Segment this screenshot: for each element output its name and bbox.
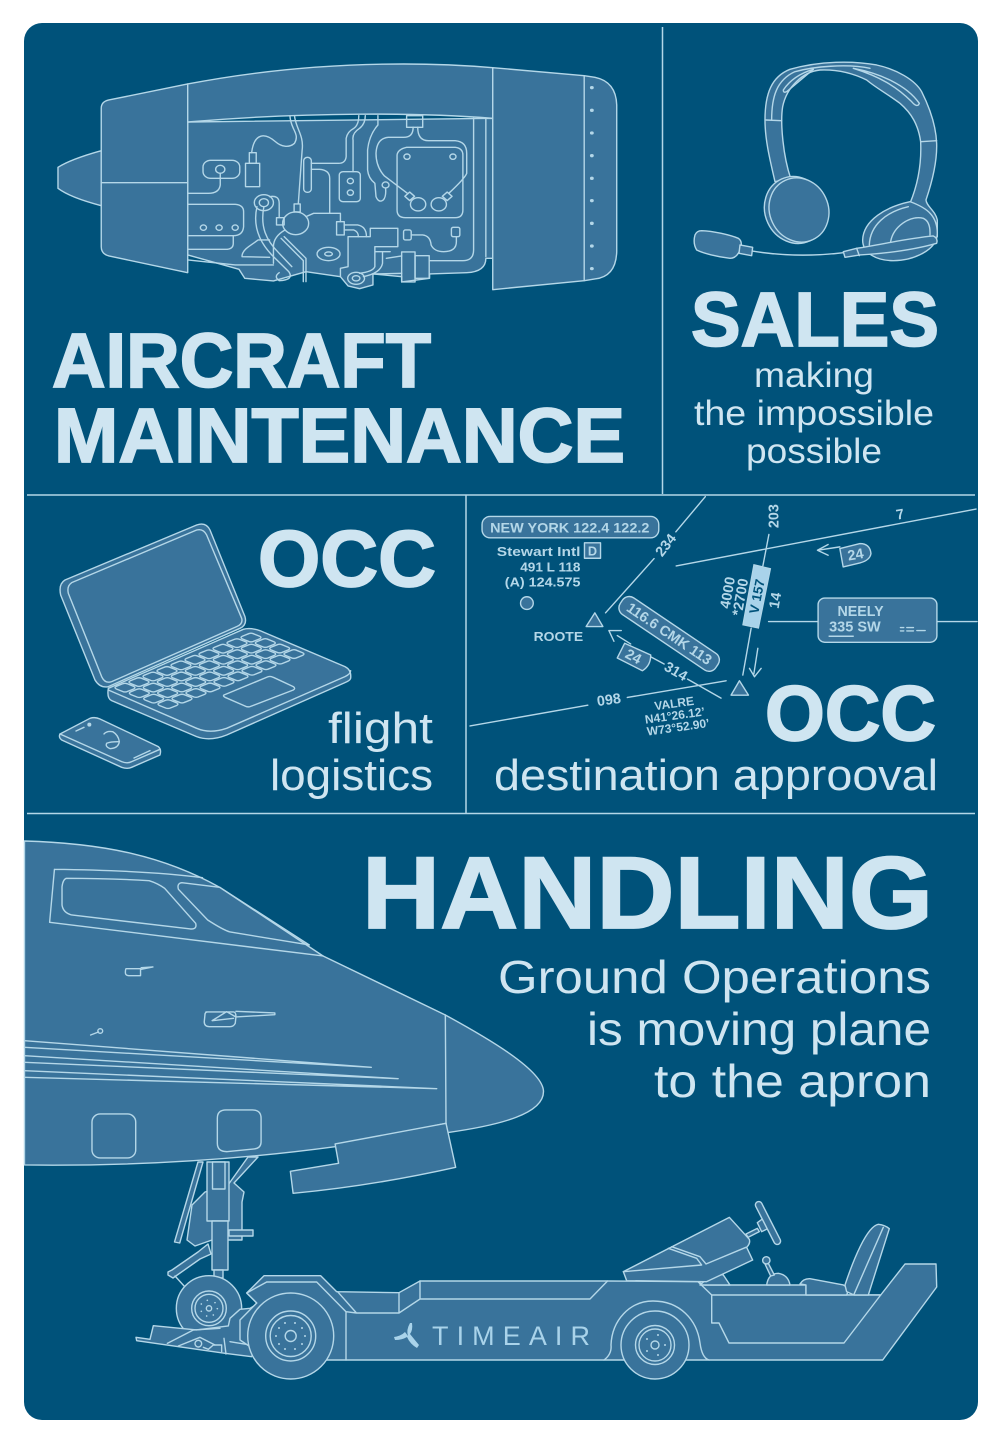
heading: occ: OCC [765,669,936,757]
illustration: aircraft tug [136,1200,937,1379]
chart: aeronautical navigation chart: 203 [767,504,783,528]
heading: handling: HANDLING [362,836,933,950]
label: Stewart Intl airport: 491 L 118 [520,559,580,574]
text: ground operations description [498,951,931,1107]
label: New York frequency pill: NEW YORK 122.4 122.2 [490,520,649,535]
text: making the impossible possible: possible [746,432,882,471]
tug steering console and seat [623,1200,889,1295]
tug body [240,1264,937,1360]
text: flight logistics: flight [328,704,433,753]
panel: aircraft maintenance [52,64,625,479]
heading: aircraft maintenance: AIRCRAFT [52,318,431,404]
text: making the impossible possible [694,356,934,471]
label: Stewart Intl airport [497,543,601,609]
label: VALRE waypoint [644,681,748,739]
label: 24 tag upper: 24 [846,546,865,565]
text: flight logistics [270,704,433,800]
chart: aeronautical navigation chart: 234 [653,531,680,560]
logo: TimeAir: TIMEAIR [432,1321,590,1351]
text: ground operations description: is moving plane [587,1003,931,1055]
label: Stewart Intl airport: (A) 124.575 [505,575,580,590]
label: ROOTE waypoint [534,613,603,644]
text: ground operations description: to the apron [654,1055,931,1107]
text: flight logistics: logistics [270,751,433,800]
tug nose wheel and tow bar [136,1276,263,1357]
panel: occ destination approval [470,497,977,800]
chart: aeronautical navigation chart: 314 [661,659,690,685]
label: VALRE waypoint: VALRE [653,694,695,713]
label: VALRE waypoint: W73°52.90’ [646,716,710,739]
tug front wheel [248,1293,334,1379]
label: 116.6 CMK 113 pill: 116.6 CMK 113 [623,600,714,669]
label: V 157 airway [743,565,771,628]
label: V 157 airway: V 157 [746,578,768,615]
icon: laptop and phone [59,524,351,768]
heading: occ: OCC [258,514,436,603]
label: 24 tag upper [817,544,871,567]
chart: aeronautical navigation chart: 14 [767,591,785,610]
label: New York frequency pill [482,516,659,538]
chart: aeronautical navigation chart [470,497,977,739]
label: Stewart Intl airport: D [588,544,597,559]
heading: aircraft maintenance [52,318,625,479]
text: destination approoval: destination approoval [494,751,938,800]
panel: occ flight logistics [59,514,436,800]
chart: aeronautical navigation chart: 098 [596,691,622,710]
panel: sales [691,62,939,471]
label: Stewart Intl airport: Stewart Intl [497,544,580,559]
label: NEELY fix box: NEELY [838,604,884,620]
label: NEELY fix box [818,598,937,642]
label: VALRE waypoint: N41°26.12’ [644,704,706,727]
text: making the impossible possible: the impossible [694,394,934,433]
label: ROOTE waypoint: ROOTE [534,629,583,644]
label: NEELY fix box: 335 SW [829,620,881,636]
text: ground operations description: Ground Operations [498,951,931,1003]
icon: headset [694,62,937,261]
heading: aircraft maintenance: MAINTENANCE [54,393,625,479]
chart: aeronautical navigation chart: *2700 [730,577,752,617]
illustration: aircraft nose [24,841,543,1193]
icon: jet engine cutaway [58,64,617,290]
heading: sales: SALES [691,277,939,363]
panel: handling [24,836,937,1379]
label: 24 tag lower: 24 [622,646,644,668]
text: making the impossible possible: making [754,356,874,395]
chart: aeronautical navigation chart: 4000 [718,576,739,610]
chart: aeronautical navigation chart: 7 [895,507,906,524]
label: 24 tag lower [609,631,664,671]
tug rear wheel [621,1311,689,1379]
illustration: nose landing gear [168,1157,258,1287]
